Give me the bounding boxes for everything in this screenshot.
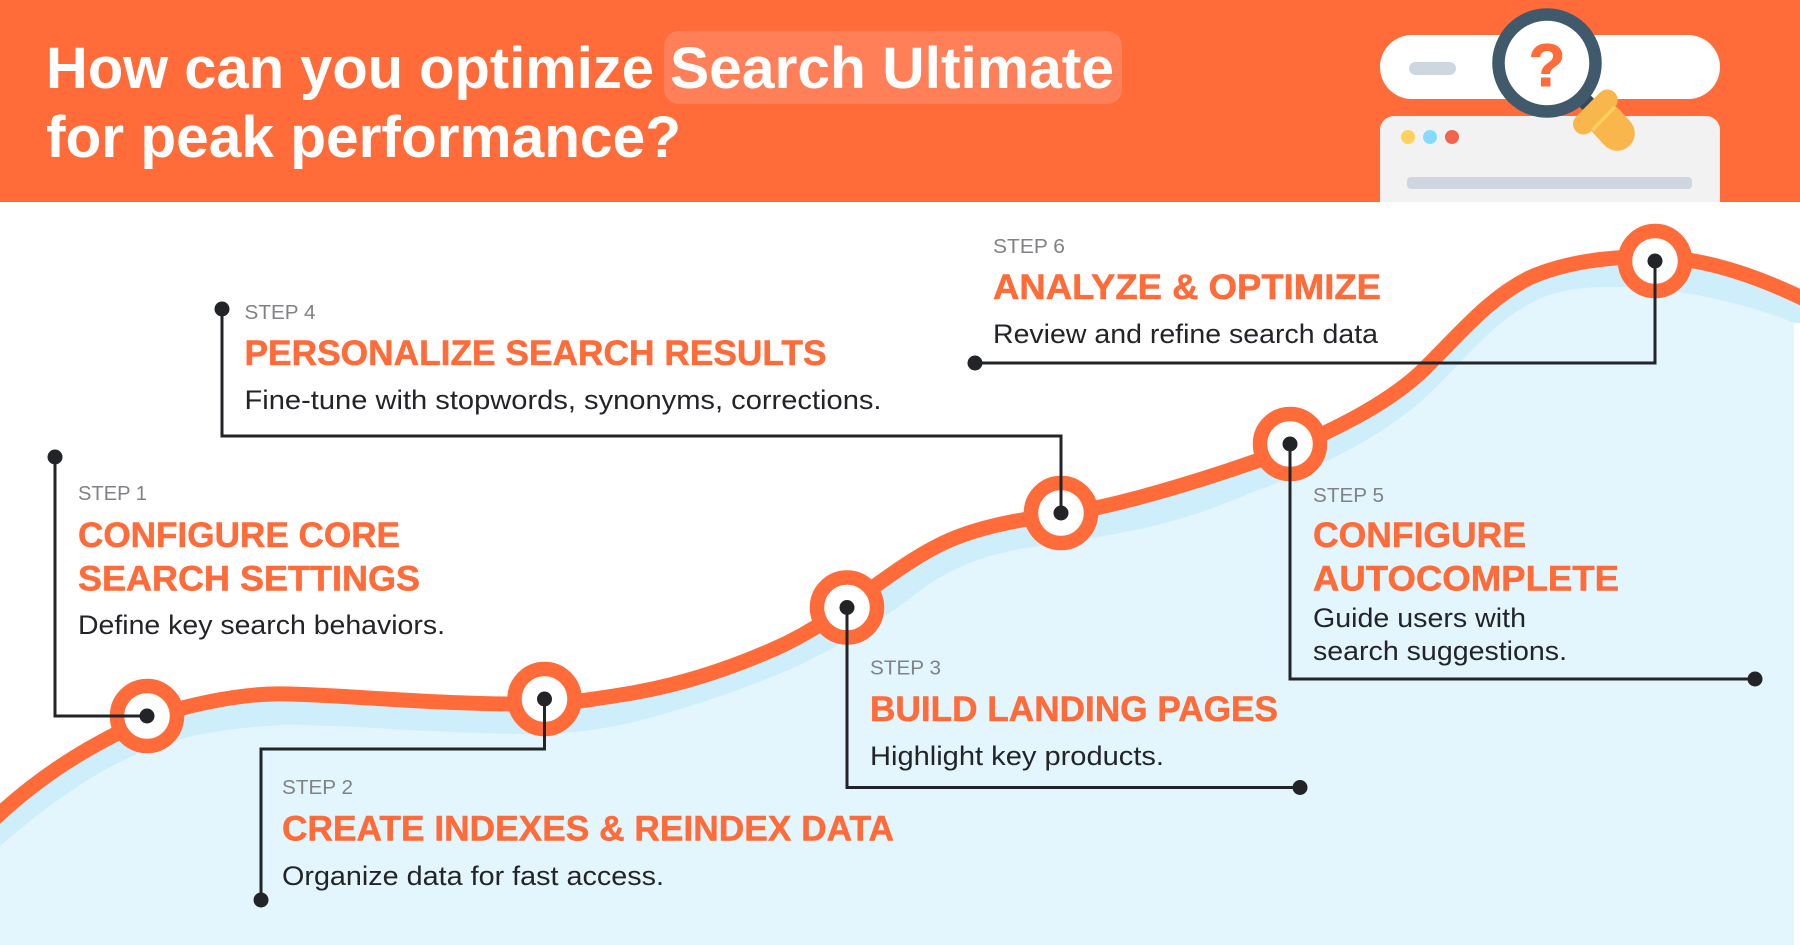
- header band: [0, 0, 1800, 202]
- step 5 connector: [1282, 436, 1762, 686]
- growth curve: [0, 257, 1800, 823]
- step 5 text: AUTOCOMPLETE: [1313, 560, 1619, 598]
- step 6 connector: [968, 254, 1662, 370]
- title: [46, 31, 1122, 170]
- step 5 text: STEP 5: [1313, 484, 1384, 507]
- step 5 text: Guide users with: [1313, 603, 1526, 633]
- step 4 text: PERSONALIZE SEARCH RESULTS: [244, 334, 826, 373]
- step 2 text: Organize data for fast access.: [282, 861, 664, 891]
- step 2 text: [282, 776, 894, 891]
- step 5 text: search suggestions.: [1313, 636, 1567, 666]
- step 6 text: [993, 235, 1381, 349]
- step 2 text: CREATE INDEXES & REINDEX DATA: [282, 810, 894, 848]
- step 1 text: Define key search behaviors.: [78, 610, 445, 640]
- step 2 connector: [254, 692, 552, 908]
- step 5 text: CONFIGURE: [1313, 516, 1526, 555]
- step 3 text: STEP 3: [870, 656, 941, 680]
- step 4 text: Fine-tune with stopwords, synonyms, corrections.: [244, 385, 882, 415]
- step 4 text: [244, 301, 882, 415]
- step 6 text: Review and refine search data: [993, 319, 1379, 349]
- step 6 text: ANALYZE & OPTIMIZE: [993, 268, 1381, 307]
- title: How can you optimize: [46, 36, 654, 101]
- step nodes: [117, 231, 1685, 746]
- step 3 text: Highlight key products.: [870, 741, 1164, 771]
- step 2 text: STEP 2: [282, 776, 353, 799]
- icon: search bar and browser with magnifying glass: ?: [1529, 32, 1565, 99]
- step 4 connector: [214, 302, 1068, 520]
- step 1 text: SEARCH SETTINGS: [78, 560, 420, 598]
- step 1 text: [78, 482, 445, 640]
- title: for peak performance?: [46, 105, 681, 170]
- icon: search bar and browser with magnifying glass: [1380, 14, 1720, 202]
- step 1 text: STEP 1: [78, 482, 147, 505]
- step 3 text: [870, 656, 1278, 771]
- step 1 text: CONFIGURE CORE: [78, 516, 400, 555]
- step 5 text: [1313, 484, 1619, 666]
- step 3 text: BUILD LANDING PAGES: [870, 690, 1278, 729]
- step 6 text: STEP 6: [993, 235, 1065, 258]
- step 4 text: STEP 4: [244, 301, 316, 324]
- title: Search Ultimate: [670, 36, 1114, 101]
- step 3 connector: [840, 600, 1308, 795]
- background area under curve: [0, 257, 1800, 945]
- step 1 connector: [48, 450, 154, 724]
